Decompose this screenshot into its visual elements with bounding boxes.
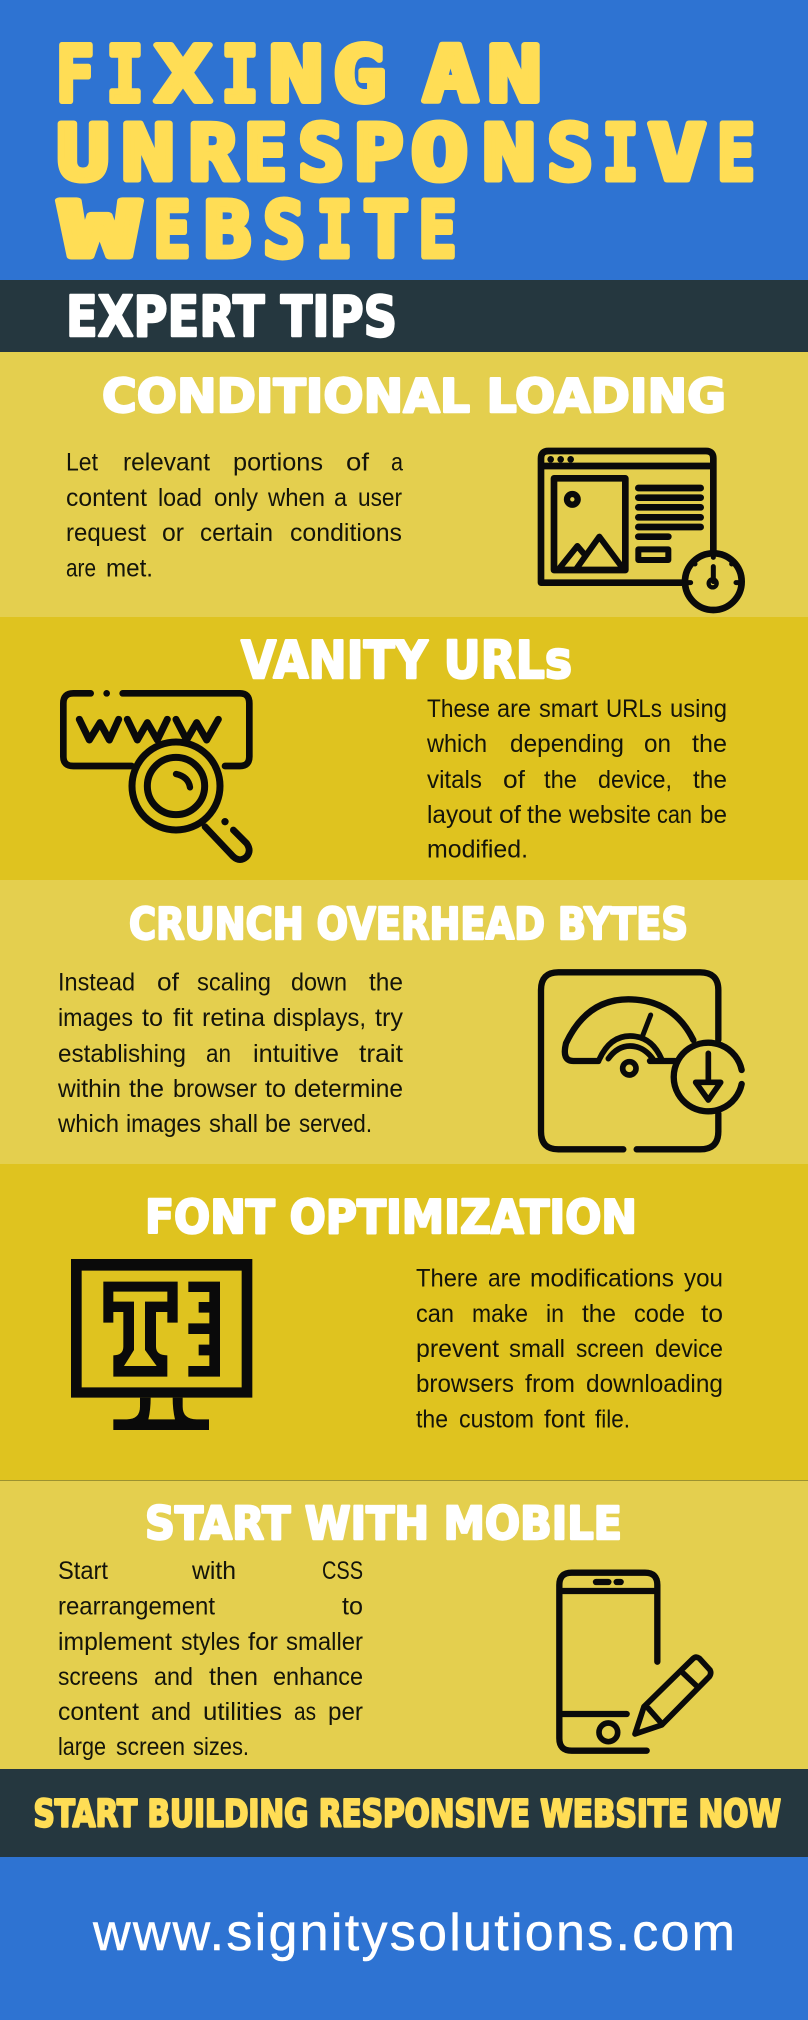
text block: font optimization: file. [595, 1406, 630, 1434]
text block: font optimization: prevent [416, 1335, 499, 1363]
text block: start with mobile: rearrangement [58, 1592, 215, 1620]
text block: font optimization: to [701, 1300, 723, 1328]
icon: monitor with typeface [71, 1259, 252, 1430]
text block: conditional loading: Let [66, 448, 98, 476]
text block: vanity urls: device, [598, 766, 672, 794]
title: X [155, 31, 211, 120]
text block: crunch overhead bytes: of [157, 969, 179, 997]
text block: font optimization: screen [576, 1335, 644, 1363]
text block: start with mobile: Start [58, 1557, 108, 1585]
text block: font optimization: device [655, 1335, 723, 1363]
title: N [482, 110, 536, 198]
text block: crunch overhead bytes: the [129, 1075, 164, 1103]
text block: font optimization: code [634, 1300, 685, 1328]
text block: vanity urls: URLs [606, 695, 662, 723]
text block: font optimization: font [544, 1406, 585, 1434]
text block: crunch overhead bytes: the [369, 969, 403, 997]
title: T [363, 186, 409, 276]
text block: start with mobile: enhance [273, 1663, 363, 1691]
text block: conditional loading: certain [200, 519, 273, 547]
title: G [333, 31, 386, 120]
text block: font optimization: small [509, 1335, 565, 1363]
text block: crunch overhead bytes: which [57, 1110, 119, 1138]
title: I [316, 186, 352, 276]
text block: conditional loading: request [66, 519, 146, 547]
text block: font optimization [416, 1264, 723, 1434]
text block: crunch overhead bytes: images [126, 1110, 201, 1138]
text block: vanity urls: vitals [427, 766, 482, 794]
heading: crunch overhead bytes: CRUNCH OVERHEAD BYTES [129, 899, 688, 950]
text block: vanity urls: modified. [427, 836, 528, 864]
text block: crunch overhead bytes: try [375, 1004, 403, 1032]
icon: www magnifier [63, 690, 249, 860]
text block: vanity urls: of [503, 766, 525, 794]
text block: crunch overhead bytes: retina [202, 1004, 265, 1032]
panel: conditional loading [0, 352, 808, 617]
panel: title header [0, 0, 808, 280]
text block: start with mobile: as [294, 1698, 316, 1726]
text block: vanity urls: using [670, 695, 727, 723]
text block: crunch overhead bytes: browser [173, 1075, 257, 1103]
text block: vanity urls: website [568, 801, 651, 829]
text block: crunch overhead bytes [57, 969, 403, 1138]
text block: conditional loading: when [267, 484, 325, 512]
title: V [648, 110, 706, 198]
text block: vanity urls: the [692, 730, 727, 758]
text block: crunch overhead bytes: served. [299, 1110, 372, 1138]
title: N [488, 31, 542, 120]
text block: crunch overhead bytes: displays, [273, 1004, 366, 1032]
title: F [56, 31, 94, 120]
icon: speed gauge with download [541, 972, 742, 1149]
text block: conditional loading: user [358, 484, 402, 512]
text block: font optimization: are [488, 1264, 521, 1292]
panel: font optimization [0, 1164, 808, 1481]
text block: crunch overhead bytes: down [291, 969, 347, 997]
title: P [354, 110, 404, 198]
text block: conditional loading: a [334, 484, 347, 512]
text block: font optimization: from [525, 1370, 575, 1398]
text block: conditional loading: a [391, 448, 403, 476]
text block: crunch overhead bytes: determine [294, 1075, 403, 1103]
title: I [222, 31, 258, 120]
text block: font optimization: browsers [416, 1370, 514, 1398]
text block: font optimization: the [582, 1300, 616, 1328]
title: E [244, 110, 287, 198]
text block: font optimization: in [546, 1300, 564, 1328]
title: W [60, 186, 140, 276]
text block: start with mobile: sizes. [193, 1733, 249, 1761]
text block: start with mobile: utilities [203, 1698, 282, 1726]
text block: conditional loading: load [158, 484, 202, 512]
text block: start with mobile: CSS [322, 1557, 363, 1585]
icon: web page with gauge [541, 451, 742, 610]
text block: crunch overhead bytes: fit [173, 1004, 193, 1032]
text block: vanity urls [426, 695, 727, 864]
text block: start with mobile [58, 1557, 363, 1761]
text block: crunch overhead bytes: be [265, 1110, 291, 1138]
text block: start with mobile: per [328, 1698, 363, 1726]
text block: vanity urls: the [544, 766, 577, 794]
text block: vanity urls: the [527, 801, 562, 829]
text block: vanity urls: can [657, 801, 692, 829]
text block: crunch overhead bytes: Instead [58, 969, 135, 997]
text block: font optimization: downloading [586, 1370, 723, 1398]
panel: start with mobile [0, 1481, 808, 1769]
text block: vanity urls: be [700, 801, 727, 829]
text block: conditional loading: conditions [290, 519, 402, 547]
text block: start with mobile: and [151, 1698, 191, 1726]
title: A [423, 31, 478, 120]
text block: start with mobile: screens [58, 1663, 138, 1691]
text block: start with mobile: for [248, 1628, 278, 1656]
text block: start with mobile: smaller [286, 1628, 363, 1656]
text block: start with mobile: with [191, 1557, 236, 1585]
text block: crunch overhead bytes: establishing [58, 1040, 186, 1068]
panel: call to action banner [0, 1769, 808, 1857]
text block: crunch overhead bytes: intuitive [253, 1040, 339, 1068]
title: I [602, 110, 638, 198]
text block: conditional loading: only [214, 484, 258, 512]
text block: vanity urls: of [499, 801, 521, 829]
text block: conditional loading: of [346, 448, 369, 476]
text block: start with mobile: implement [58, 1628, 172, 1656]
text block: start with mobile: styles [181, 1628, 240, 1656]
panel: expert tips banner [0, 280, 808, 352]
text block: start with mobile: large [58, 1733, 106, 1761]
title: N [122, 110, 174, 198]
text block: font optimization: There [416, 1264, 478, 1292]
text block: font optimization: custom [459, 1406, 534, 1434]
text block: vanity urls: on [644, 730, 671, 758]
text block: conditional loading: or [162, 519, 184, 547]
title: E [154, 186, 190, 276]
text block: font optimization: can [416, 1300, 454, 1328]
title: U [56, 110, 110, 198]
text block: vanity urls: are [497, 695, 531, 723]
text block: crunch overhead bytes: an [206, 1040, 231, 1068]
text block: vanity urls: smart [539, 695, 598, 723]
heading: vanity urls: VANITY URLs [241, 631, 572, 691]
title: S [298, 110, 344, 198]
panel: vanity urls [0, 617, 808, 880]
website url: www.signitysolutions.com [92, 1904, 735, 1962]
heading: expert tips: EXPERT TIPS [66, 285, 397, 350]
text block: conditional loading [66, 448, 403, 582]
text block: font optimization: modifications [530, 1264, 674, 1292]
text block: font optimization: the [416, 1406, 448, 1434]
title: S [547, 110, 593, 198]
text block: vanity urls: layout [427, 801, 492, 829]
panel: footer [0, 1857, 808, 2020]
text block: crunch overhead bytes: to [142, 1004, 163, 1032]
text block: font optimization: you [684, 1264, 723, 1292]
text block: crunch overhead bytes: trait [359, 1040, 403, 1068]
title: E [418, 186, 456, 276]
text block: start with mobile: and [154, 1663, 193, 1691]
text block: conditional loading: content [66, 484, 147, 512]
heading: start with mobile: START WITH MOBILE [145, 1497, 622, 1550]
title: S [263, 186, 305, 276]
text block: conditional loading: portions [233, 448, 323, 476]
heading: font optimization: FONT OPTIMIZATION [145, 1190, 637, 1244]
heading: conditional loading: CONDITIONAL LOADING [102, 369, 726, 423]
text block: font optimization: make [472, 1300, 528, 1328]
text block: conditional loading: relevant [123, 448, 210, 476]
text block: vanity urls: depending [510, 730, 624, 758]
text block: conditional loading: are [66, 554, 96, 582]
text block: start with mobile: then [209, 1663, 258, 1691]
text block: conditional loading: met. [106, 554, 153, 582]
text block: vanity urls: These [427, 695, 490, 723]
title: I [106, 31, 144, 120]
text block: crunch overhead bytes: shall [209, 1110, 258, 1138]
panel: crunch overhead bytes [0, 880, 808, 1164]
title: N [269, 31, 323, 120]
text block: crunch overhead bytes: to [265, 1075, 286, 1103]
text block: vanity urls: the [693, 766, 727, 794]
text block: vanity urls: which [426, 730, 487, 758]
text block: start with mobile: content [58, 1698, 139, 1726]
title: R [188, 110, 238, 198]
title: B [204, 186, 251, 276]
text block: crunch overhead bytes: images [58, 1004, 133, 1032]
icon: phone with pencil [559, 1573, 711, 1751]
title: E [717, 110, 755, 198]
title: O [411, 110, 468, 198]
text block: crunch overhead bytes: within [57, 1075, 121, 1103]
text block: start with mobile: screen [116, 1733, 185, 1761]
text block: crunch overhead bytes: scaling [197, 969, 271, 997]
title [56, 31, 755, 276]
text block: start with mobile: to [342, 1592, 363, 1620]
